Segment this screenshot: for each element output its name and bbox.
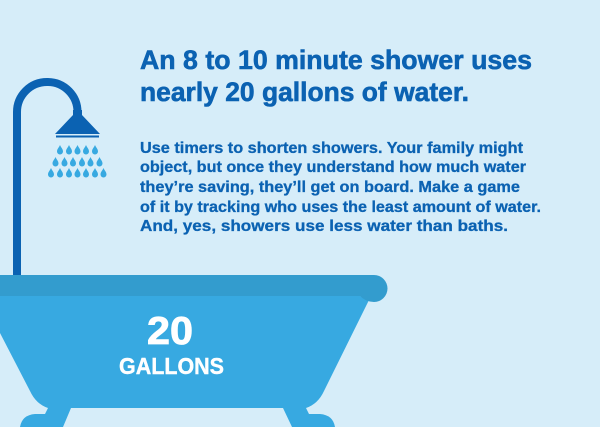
gallons figure: GALLONS [119, 353, 224, 379]
body text: of it by tracking who uses the least amount of water. [140, 199, 541, 216]
body text: Use timers to shorten showers. Your family might [140, 140, 524, 157]
body text: they’re saving, they’ll get on board. Make a game [140, 179, 520, 196]
gallons figure [119, 310, 224, 379]
title: nearly 20 gallons of water. [140, 77, 469, 107]
tub body [0, 296, 369, 427]
body text: And, yes, showers use less water than baths. [140, 218, 508, 235]
icon: bathtub [0, 275, 388, 427]
icon: shower [17, 82, 106, 276]
tub rim [0, 275, 388, 302]
title: An 8 to 10 minute shower uses [140, 45, 532, 75]
shower pipe [17, 82, 78, 276]
water drops [48, 145, 106, 178]
body text: object, but once they understand how much water [140, 159, 526, 176]
body text [140, 140, 541, 235]
gallons figure: 20 [147, 310, 193, 353]
title [140, 45, 532, 107]
shower head [55, 110, 100, 138]
